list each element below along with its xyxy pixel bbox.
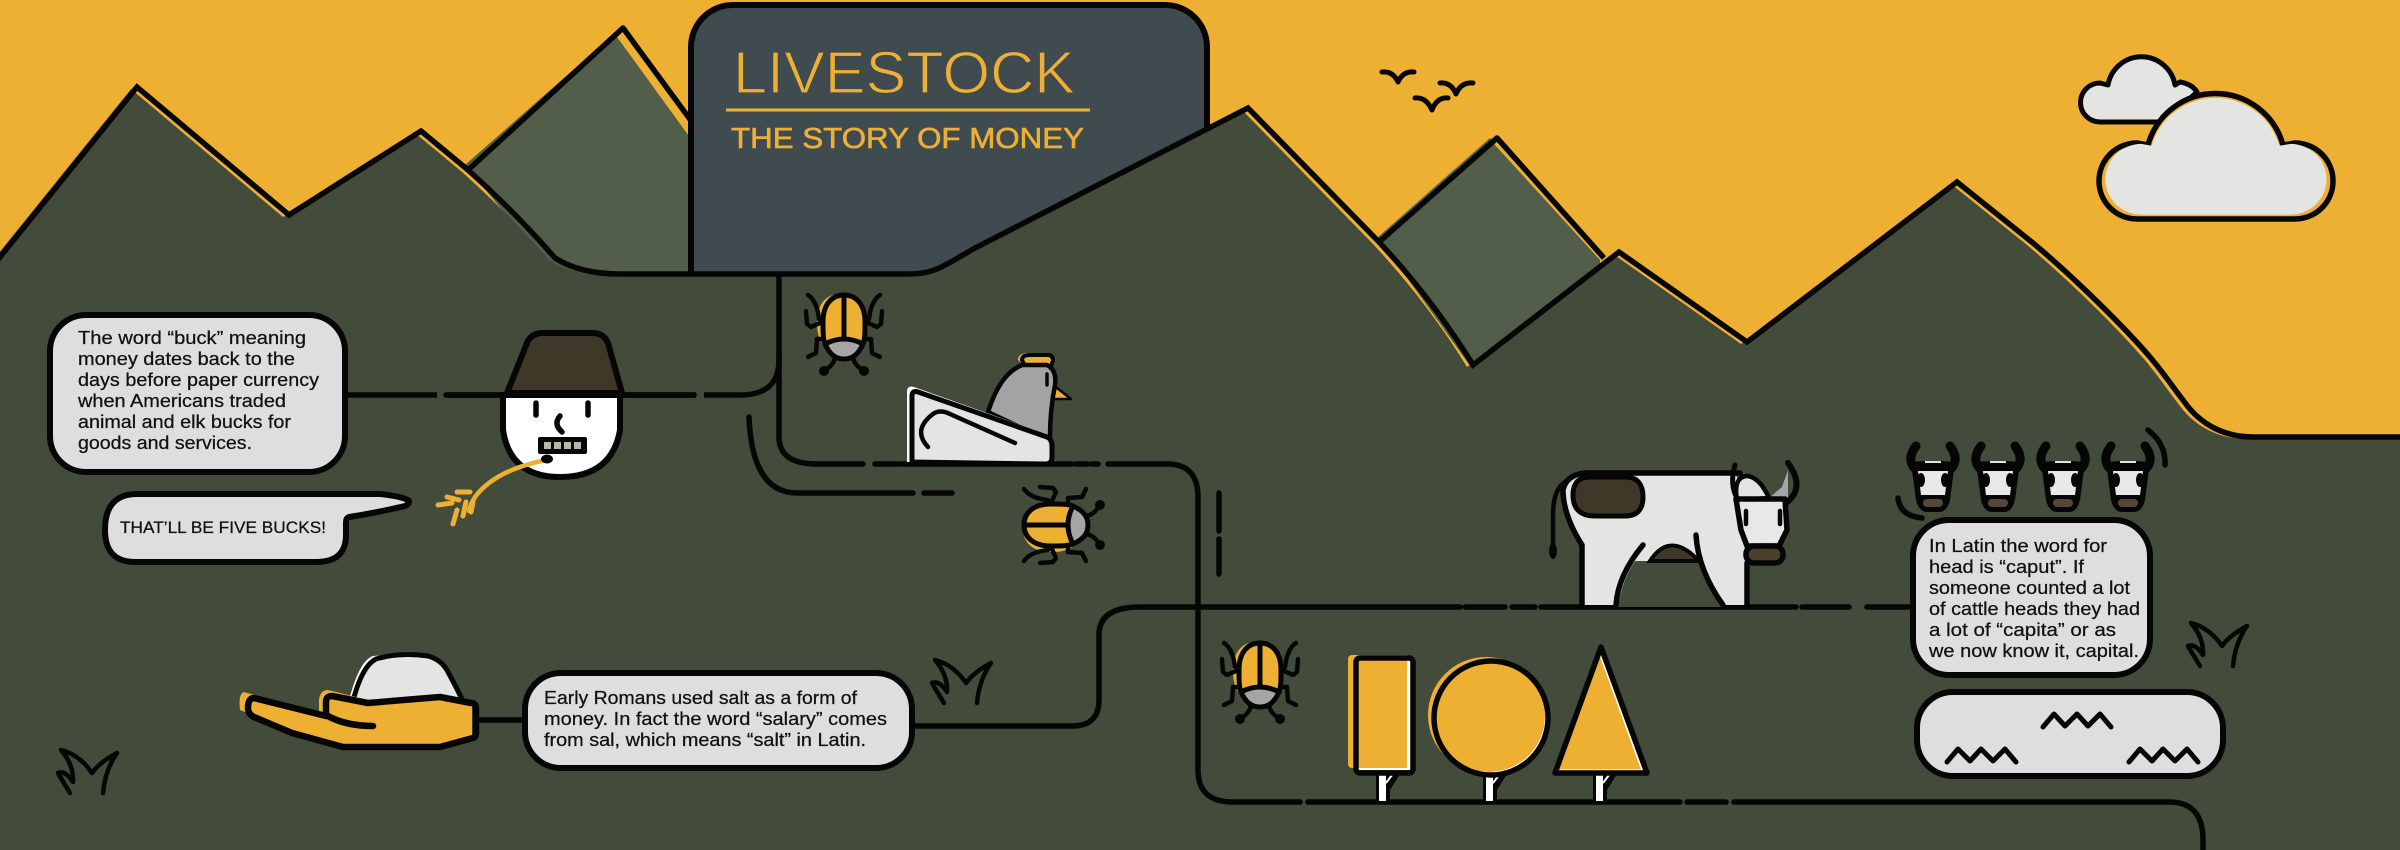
cow horns: [1769, 470, 1788, 500]
subtitle: THE STORY OF MONEY: [731, 123, 1084, 155]
text box: salt: Early Romans used salt as a form of: [544, 688, 858, 708]
text box: caput: [1913, 520, 2150, 675]
title: livestock: LIVESTOCK: [733, 40, 1075, 106]
text box: buck: when Americans traded: [77, 391, 286, 411]
text box: buck: money dates back to the: [78, 349, 295, 369]
tree: rectangle: [1348, 655, 1413, 801]
text box: buck: days before paper currency: [78, 370, 319, 390]
text box: caput: head is “caput”. If: [1929, 557, 2085, 577]
icon: wheat straw: [438, 460, 546, 524]
zigzag box: [1917, 692, 2223, 776]
grass tuft: right: [2188, 623, 2247, 666]
text box: caput: we now know it, capital.: [1928, 641, 2139, 661]
cow spot: [1573, 477, 1643, 516]
text box: caput: of cattle heads they had: [1929, 599, 2140, 619]
text box: buck: goods and services.: [78, 433, 252, 453]
connector lines: [347, 274, 2203, 850]
speech bubble: THAT’LL BE FIVE BUCKS!: [120, 519, 326, 537]
cow head: [1736, 499, 1787, 546]
cow head dome: [1736, 476, 1769, 500]
back mountain: left: [465, 28, 700, 280]
beetle: sideways: [1023, 487, 1105, 563]
text box: salt: [525, 673, 912, 768]
icon: hen: [907, 353, 1071, 464]
clouds: [2080, 57, 2333, 219]
large cloud fill: [2105, 98, 2327, 215]
tree: triangle: [1555, 647, 1647, 801]
text box: buck: animal and elk bucks for: [78, 412, 291, 432]
small cloud: [2080, 57, 2197, 122]
large cloud: [2099, 94, 2333, 219]
beetle: lower: [1222, 642, 1298, 724]
text box: caput: someone counted a lot: [1929, 578, 2130, 598]
salt block: [349, 653, 420, 700]
title panel: [691, 5, 1207, 290]
grass tuft: middle: [932, 660, 991, 703]
text box: buck: The word “buck” meaning: [78, 328, 306, 348]
icon: hand with salt: [240, 653, 476, 747]
tree: circle: [1428, 657, 1548, 801]
cow tail: [1553, 482, 1565, 545]
title rule: [726, 108, 1090, 112]
back mountain: right: [1378, 138, 1604, 370]
birds: [1382, 72, 1473, 110]
beetle: top: [806, 294, 882, 376]
text box: salt: from sal, which means “salt” in Latin.: [544, 730, 866, 750]
text box: salt: money. In fact the word “salary” comes: [544, 709, 887, 729]
icon: cow: [1549, 463, 1797, 607]
text box: caput: a lot of “capita” or as: [1929, 620, 2116, 640]
text box: buck: [50, 315, 345, 472]
text box: caput: In Latin the word for: [1929, 536, 2107, 556]
speech bubble: [105, 494, 409, 562]
cattle heads: [1911, 446, 2150, 512]
icon: man with hat: [438, 333, 694, 524]
grass tuft: bottom left: [58, 750, 117, 793]
